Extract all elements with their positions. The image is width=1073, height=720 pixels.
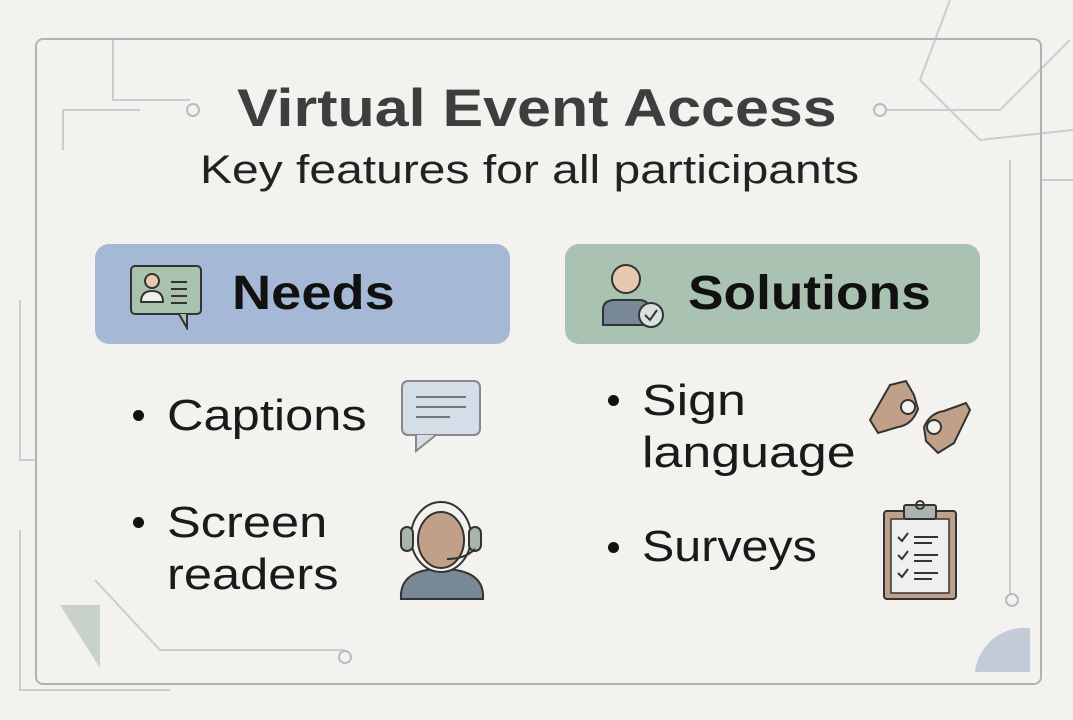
- item: surveys: Surveys: [642, 522, 817, 571]
- icon: signing hands: [868, 380, 972, 454]
- item: captions: Captions: [167, 391, 367, 440]
- list: needs: [133, 380, 484, 600]
- icon: clipboard: [883, 500, 957, 600]
- item: screen readers: readers: [167, 550, 339, 599]
- panel: solutions header: [565, 244, 980, 344]
- item: sign language: [608, 376, 856, 477]
- icon: caption bubble: [401, 380, 481, 453]
- list: solutions: [608, 376, 972, 600]
- title: Virtual Event Access: [237, 79, 837, 138]
- item: sign language: language: [642, 428, 856, 477]
- item: screen readers: [133, 498, 339, 599]
- subtitle: Key features for all participants: [200, 148, 859, 192]
- icon: user check: [602, 264, 664, 328]
- item: sign language: Sign: [642, 376, 746, 425]
- item: screen readers: Screen: [167, 498, 327, 547]
- panel: needs header: [95, 244, 510, 344]
- heading: solutions: Solutions: [688, 267, 931, 320]
- icon: headset person: [400, 501, 484, 600]
- icon: profile card: [130, 265, 202, 330]
- heading: needs: Needs: [232, 267, 395, 320]
